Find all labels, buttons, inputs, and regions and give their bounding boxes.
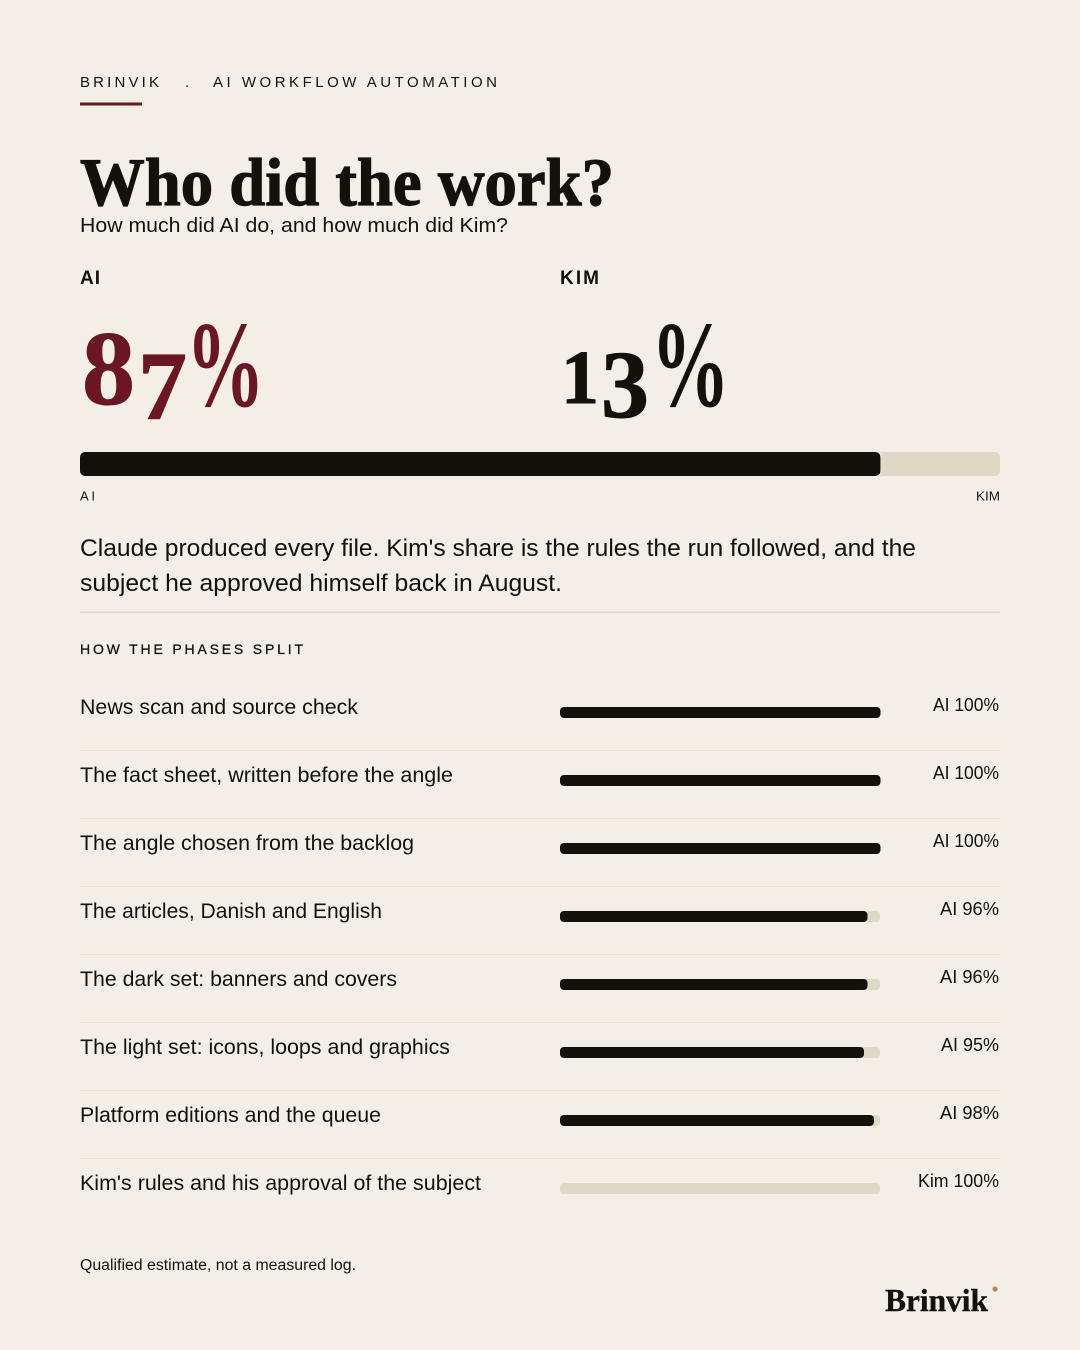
row: articles bbox=[80, 899, 999, 923]
row: angle: AI 100% bbox=[933, 831, 999, 851]
AI value: 8 bbox=[82, 310, 135, 427]
row: Kim's rules bbox=[80, 1171, 999, 1195]
row: platform editions bbox=[80, 1103, 999, 1127]
summary paragraph bbox=[80, 535, 916, 597]
row: Kim's rules: Kim's rules and his approval of the subject bbox=[80, 1172, 481, 1195]
row: articles: AI 96% bbox=[940, 899, 999, 919]
split bar: KIM bbox=[976, 488, 1000, 504]
Kim value: 3 bbox=[601, 331, 649, 438]
phase rows bbox=[80, 695, 1000, 1195]
Kim value bbox=[561, 298, 730, 438]
eyebrow: . bbox=[185, 74, 189, 91]
subtitle: How much did AI do, and how much did Kim? bbox=[80, 214, 508, 237]
AI value bbox=[82, 298, 265, 441]
stat: AI share bbox=[80, 268, 265, 441]
row: dark set bbox=[80, 967, 999, 991]
row: news scan bbox=[80, 695, 999, 719]
row: articles: The articles, Danish and English bbox=[80, 900, 382, 923]
Kim value: % bbox=[651, 298, 730, 433]
row: news scan: AI 100% bbox=[933, 695, 999, 715]
row: dark set: The dark set: banners and covers bbox=[80, 968, 397, 991]
summary paragraph: subject he approved himself back in August. bbox=[80, 570, 562, 597]
title: Who did the work? bbox=[80, 144, 614, 220]
stat: Kim share bbox=[560, 268, 730, 438]
row: platform editions: Platform editions and the queue bbox=[80, 1104, 381, 1127]
Kim value: 1 bbox=[561, 336, 599, 420]
AI value: 7 bbox=[138, 333, 187, 441]
row: fact sheet bbox=[80, 763, 999, 787]
row: fact sheet: AI 100% bbox=[933, 763, 999, 783]
Kim label: KIM bbox=[560, 268, 599, 289]
summary paragraph: Claude produced every file. Kim's share is the rules the run followed, and the bbox=[80, 535, 916, 562]
eyebrow: BRINVIK bbox=[80, 74, 159, 91]
row: light set: The light set: icons, loops and graphics bbox=[80, 1036, 450, 1059]
row: light set bbox=[80, 1035, 999, 1059]
row: news scan: News scan and source check bbox=[80, 696, 359, 719]
row: angle bbox=[80, 831, 999, 855]
AI label: AI bbox=[80, 268, 100, 289]
row: light set: AI 95% bbox=[941, 1035, 999, 1055]
row: platform editions: AI 98% bbox=[940, 1103, 999, 1123]
eyebrow bbox=[80, 74, 497, 91]
row: dark set: AI 96% bbox=[940, 967, 999, 987]
AI value: % bbox=[186, 298, 265, 433]
row: fact sheet: The fact sheet, written before the angle bbox=[80, 764, 453, 787]
eyebrow: AI WORKFLOW AUTOMATION bbox=[213, 74, 497, 91]
logo: Brinvik bbox=[885, 1282, 988, 1318]
accent rule bbox=[80, 102, 142, 106]
row: Kim's rules: Kim 100% bbox=[918, 1171, 999, 1191]
split bar bbox=[80, 452, 1000, 504]
row: angle: The angle chosen from the backlog bbox=[80, 832, 414, 855]
section heading: HOW THE PHASES SPLIT bbox=[80, 641, 303, 657]
split bar: AI bbox=[80, 488, 95, 504]
footnote: Qualified estimate, not a measured log. bbox=[80, 1257, 356, 1274]
